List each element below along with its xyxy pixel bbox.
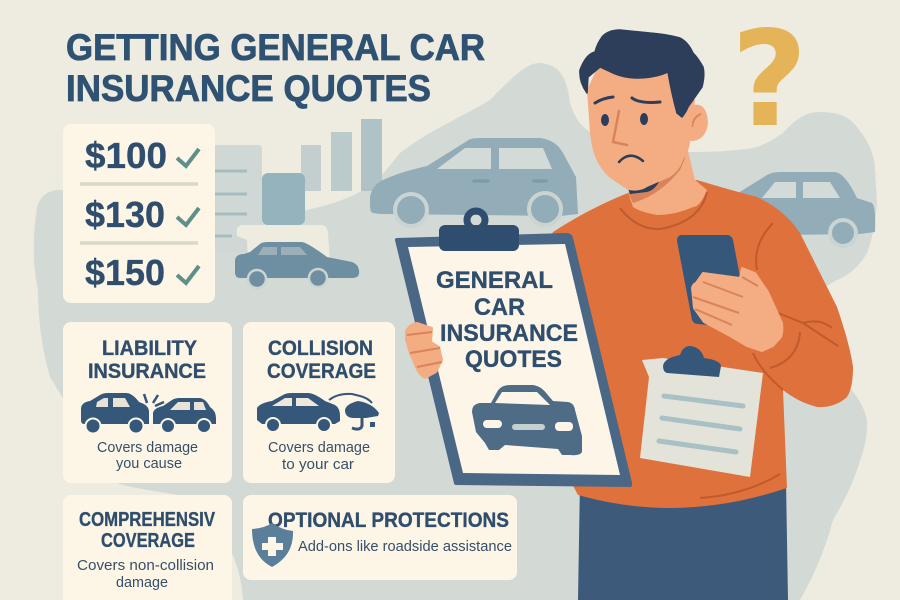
sweater folds — [620, 192, 838, 498]
description: Covers damage — [268, 439, 370, 456]
title: INSURANCE QUOTES — [66, 68, 431, 109]
sweater — [500, 180, 853, 508]
clipboard text: INSURANCE — [440, 320, 578, 347]
hand holding clipboard — [406, 323, 442, 378]
phone — [677, 235, 741, 325]
background right car — [700, 172, 875, 246]
icon: check 1 — [177, 149, 199, 166]
ear — [686, 105, 708, 141]
heading: INSURANCE — [88, 360, 206, 383]
text lines — [659, 396, 743, 452]
man — [500, 30, 853, 600]
description: to your car — [282, 456, 354, 473]
background small car — [235, 242, 359, 288]
price: $100: $100 — [85, 135, 167, 176]
description: Covers damage — [97, 439, 198, 456]
description: Covers non-collision — [77, 557, 214, 574]
panel: optional protections — [243, 495, 517, 580]
panel: prices — [63, 124, 215, 303]
neck shadow — [628, 148, 687, 203]
description: damage — [116, 574, 168, 591]
pants — [578, 480, 788, 600]
clip ring — [467, 211, 485, 229]
panel: collision coverage — [243, 322, 395, 483]
description: you cause — [116, 455, 182, 472]
clip — [663, 346, 721, 377]
clipboard text — [436, 267, 578, 373]
heading — [88, 337, 206, 383]
heading: COMPREHENSIV — [79, 509, 216, 531]
paper — [408, 244, 620, 475]
description — [268, 439, 370, 473]
clipboard text: GENERAL — [436, 267, 553, 294]
hair — [580, 30, 704, 117]
chin shadow — [628, 180, 660, 194]
heading: COVERAGE — [101, 530, 195, 552]
heading: COVERAGE — [267, 360, 376, 383]
clipboard text: QUOTES — [465, 346, 562, 373]
main clipboard — [397, 211, 630, 485]
icon: check 2 — [177, 208, 199, 225]
heading: COLLISION — [268, 337, 373, 360]
eyes and brows — [595, 97, 660, 126]
description — [97, 439, 198, 472]
heading: LIABILITY — [102, 337, 197, 360]
title — [66, 27, 485, 109]
heading — [267, 337, 376, 383]
small clipboard — [640, 346, 763, 477]
heading — [79, 509, 216, 552]
icon: check 3 — [177, 266, 199, 283]
price: $150: $150 — [85, 252, 165, 293]
description: Add-ons like roadside assistance — [298, 538, 512, 555]
heading: OPTIONAL PROTECTIONS — [268, 509, 509, 532]
clipboard text: CAR — [474, 294, 525, 321]
hand holding phone — [692, 268, 782, 351]
title: GETTING GENERAL CAR — [66, 27, 485, 68]
clip — [439, 225, 519, 251]
description — [77, 557, 214, 591]
ear line — [692, 114, 701, 127]
icon: shield — [252, 523, 293, 567]
face — [587, 62, 695, 191]
background buildings and bars — [215, 119, 382, 262]
price: $130: $130 — [85, 194, 165, 235]
nose and mouth — [613, 111, 627, 145]
neck — [628, 147, 707, 215]
finger lines — [693, 277, 758, 325]
icon: car and damaged car — [257, 393, 379, 432]
icon: car front — [472, 385, 582, 455]
panel: comprehensive coverage — [63, 495, 232, 600]
icon: two cars colliding — [81, 393, 216, 434]
panel: liability insurance — [63, 322, 232, 483]
background large car — [370, 138, 578, 226]
question mark: ? — [731, 3, 808, 157]
